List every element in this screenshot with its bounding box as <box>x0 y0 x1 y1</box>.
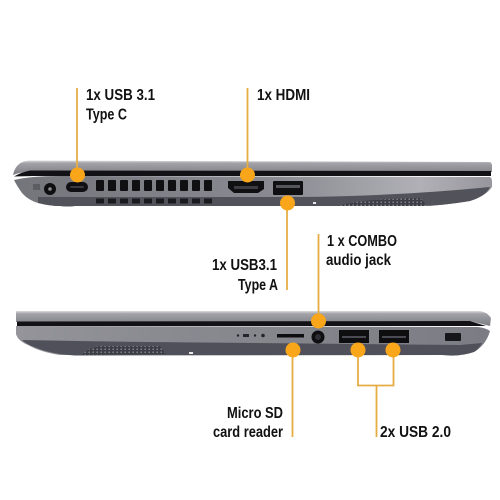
port: micro SD <box>277 334 304 338</box>
indicator light <box>313 202 316 204</box>
base <box>14 176 492 206</box>
port: audio jack <box>312 330 324 344</box>
base <box>16 326 490 355</box>
port: lock slot <box>445 333 461 341</box>
callout: USB 3.1 Type A: 1x USB3.1 <box>212 257 277 274</box>
indicator light <box>189 352 193 354</box>
callout: micro SD card reader: Micro SD <box>227 405 283 422</box>
callout: USB 3.1 Type C: Type C <box>86 106 127 123</box>
callout: HDMI <box>240 87 310 182</box>
lid <box>13 160 492 175</box>
speaker grille <box>82 346 166 355</box>
hinge gap <box>14 170 491 176</box>
callout: USB 3.1 Type C: 1x USB 3.1 <box>86 87 155 104</box>
callout: HDMI: 1x HDMI <box>257 87 310 104</box>
port: USB 2.0 left <box>339 330 369 343</box>
callout: USB 2.0 <box>350 342 451 441</box>
power jack <box>44 183 56 195</box>
callout: USB 3.1 Type C <box>70 87 155 182</box>
callout: micro SD card reader <box>213 342 300 441</box>
callout: USB 3.1 Type A <box>212 196 295 294</box>
port: USB-A <box>273 181 303 195</box>
callout: combo audio jack <box>311 233 397 328</box>
port: USB-C <box>66 182 88 192</box>
lid <box>16 311 491 326</box>
vents upper <box>96 180 212 191</box>
status indicators <box>237 334 265 337</box>
laptop: left side view <box>13 160 492 206</box>
vents lower <box>96 198 212 204</box>
callout: USB 3.1 Type A: Type A <box>238 277 278 294</box>
base underside <box>22 340 482 356</box>
callout: combo audio jack: 1 x COMBO <box>327 233 397 250</box>
callout: micro SD card reader: card reader <box>213 424 283 441</box>
port: HDMI <box>228 181 264 193</box>
speaker grille <box>338 198 426 206</box>
port: USB 2.0 right <box>379 330 409 343</box>
callout: combo audio jack: audio jack <box>326 252 391 269</box>
hinge gap <box>17 321 486 326</box>
laptop: right side view <box>16 311 491 356</box>
base underside <box>38 187 490 206</box>
power icon <box>33 184 40 190</box>
callout: USB 2.0: 2x USB 2.0 <box>380 424 451 441</box>
